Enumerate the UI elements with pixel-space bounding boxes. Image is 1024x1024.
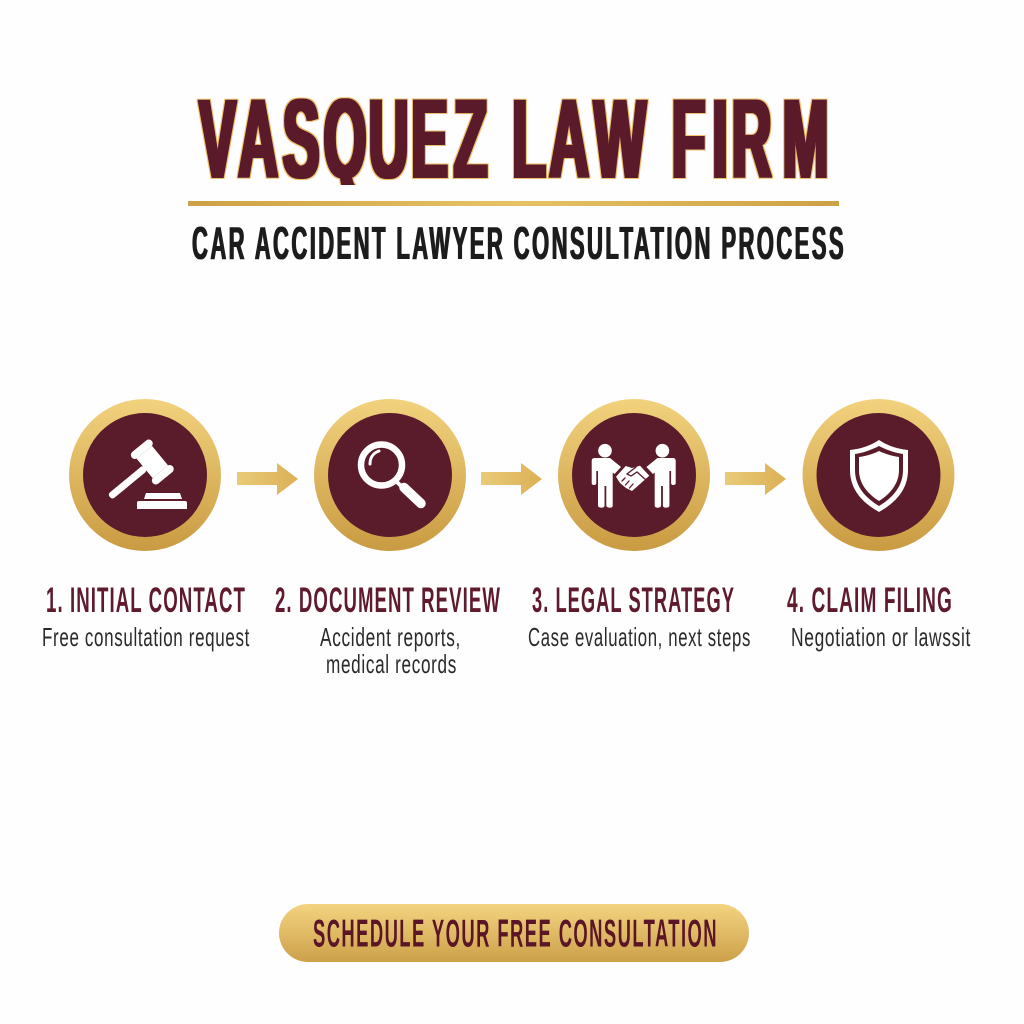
description: Free consultation request — [42, 622, 250, 652]
step 3: legal strategy — [528, 399, 751, 652]
arrow 1 — [237, 463, 298, 495]
title rule — [188, 201, 839, 206]
badge: gold ring — [69, 399, 221, 551]
icon: magnifying glass — [361, 444, 421, 504]
icon: gavel — [97, 438, 187, 513]
badge: maroon disc — [328, 413, 452, 537]
heading: 2. DOCUMENT REVIEW — [275, 581, 501, 620]
step 2: document review — [275, 399, 501, 679]
description line 1: Accident reports, — [320, 622, 461, 652]
step 4: claim filing — [787, 399, 971, 652]
heading: 3. LEGAL STRATEGY — [532, 581, 735, 620]
title: VASQUEZ LAW FIRM — [199, 76, 828, 202]
badge: maroon disc — [572, 413, 696, 537]
step 1: initial contact — [42, 399, 250, 652]
badge: maroon disc — [83, 413, 207, 537]
infographic — [43, 97, 970, 962]
badge: gold ring — [558, 399, 710, 551]
icon: two people shaking hands — [592, 444, 676, 508]
arrow 3 — [725, 463, 786, 495]
badge: maroon disc — [816, 413, 940, 537]
description line 2: medical records — [326, 649, 457, 679]
icon: shield — [850, 440, 908, 512]
heading: 1. INITIAL CONTACT — [46, 581, 246, 620]
description: Case evaluation, next steps — [528, 622, 751, 652]
call to action button — [279, 904, 749, 962]
arrow 2 — [481, 463, 542, 495]
button pill — [279, 904, 749, 962]
badge: gold ring — [314, 399, 466, 551]
badge: gold ring — [802, 399, 954, 551]
